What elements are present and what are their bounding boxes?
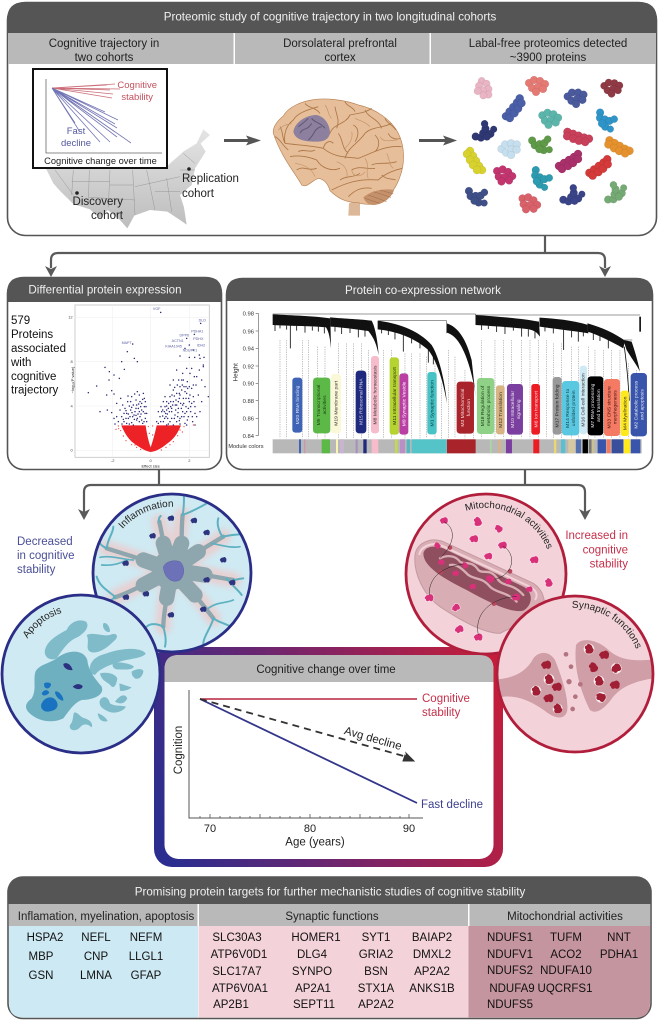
panel: cognitive change over time bbox=[154, 647, 503, 867]
chart: dendrogram: M1 Synaptic function bbox=[430, 380, 436, 426]
chart: dendrogram: M11 Intracellular transport bbox=[392, 367, 398, 425]
chart: dendrogram: 0.94 bbox=[243, 347, 255, 353]
text: 579 proteins: with bbox=[10, 357, 31, 369]
column headers bbox=[8, 33, 656, 64]
panel title: Protein co-expression network bbox=[345, 284, 501, 297]
panel header bbox=[8, 877, 651, 904]
circle: synaptic functions bbox=[496, 594, 654, 754]
column: inflammation targets bbox=[9, 926, 198, 1018]
chart: cognition by age: 90 bbox=[403, 823, 415, 835]
icons: protein clusters bbox=[462, 75, 635, 217]
column: synaptic targets: AP2A1 bbox=[295, 983, 331, 995]
column headers: Synaptic functions bbox=[285, 911, 379, 923]
inset: cognitive trajectories: stability bbox=[121, 92, 153, 103]
column: inflammation targets: CNP bbox=[84, 951, 108, 963]
chart: volcano plot: −log₁₀(P value) bbox=[70, 366, 75, 393]
chart: dendrogram: signaling bbox=[516, 399, 522, 419]
chart: dendrogram: M14 Response to bbox=[565, 389, 571, 428]
label: synaptic functions: Synaptic functions bbox=[572, 600, 640, 648]
text: increased in cognitive stability: stability bbox=[590, 558, 628, 570]
chart: dendrogram: M9 Synaptic Vesicle bbox=[401, 381, 407, 426]
text: decreased in cognitive stability: in cognitive bbox=[17, 550, 75, 562]
US map bbox=[45, 129, 210, 228]
chart: dendrogram: 0.84 bbox=[243, 434, 255, 440]
chart: volcano plot: VGF bbox=[153, 307, 161, 311]
chart: volcano plot bbox=[68, 305, 209, 468]
column: synaptic targets: AP2A2 bbox=[358, 999, 394, 1011]
chart: dendrogram: Height bbox=[233, 363, 240, 381]
panel title: Cognitive change over time bbox=[256, 664, 396, 676]
text: increased in cognitive stability: Increased in bbox=[565, 530, 628, 542]
label: apoptosis: Apoptosis bbox=[24, 608, 62, 639]
column headers: Mitochondrial activities bbox=[507, 911, 623, 923]
column: mitochondrial targets bbox=[468, 926, 650, 1018]
column headers: Inflamation, myelination, apoptosis bbox=[18, 911, 194, 923]
chart: dendrogram bbox=[228, 312, 647, 453]
panel header bbox=[7, 2, 657, 33]
arrow: brain to proteins bbox=[419, 136, 457, 146]
column: inflammation targets: LMNA bbox=[80, 970, 112, 982]
column: mitochondrial targets: NDUFV1 bbox=[487, 949, 533, 961]
panel: differential protein expression bbox=[7, 277, 222, 470]
module color bar bbox=[273, 439, 642, 453]
chart: dendrogram: M3 Mitochondrial bbox=[460, 389, 466, 427]
column: mitochondrial targets: UQCRFS1 bbox=[538, 983, 592, 995]
chart: dendrogram: M7 RNA processing bbox=[590, 383, 596, 428]
chart: dendrogram: M10 Intracellular bbox=[510, 391, 516, 428]
column: synaptic targets: SLC17A7 bbox=[212, 966, 262, 978]
column: synaptic targets: AP2B1 bbox=[213, 999, 249, 1011]
column: inflammation targets: NEFL bbox=[81, 932, 111, 944]
column: synaptic targets: BSN bbox=[364, 966, 388, 978]
column: synaptic targets: STX1A bbox=[358, 983, 395, 995]
inset: cognitive trajectories: decline bbox=[61, 138, 91, 149]
chart: dendrogram: 0.92 bbox=[243, 364, 254, 370]
text: 579 proteins: trajectory bbox=[11, 384, 59, 396]
chart: volcano plot: 0 bbox=[70, 448, 73, 453]
chart: dendrogram: M16 Cell-cell interaction bbox=[581, 373, 587, 427]
chart: dendrogram: 0.88 bbox=[243, 399, 254, 405]
chart: dendrogram: M15 Ribosomal RNA bbox=[359, 378, 365, 425]
chart: cognition by age: Fast decline bbox=[421, 799, 483, 811]
panel title: Proteomic study of cognitive trajectory in two longitudinal cohorts bbox=[164, 10, 496, 24]
text: decreased in cognitive stability: Decreased bbox=[17, 536, 73, 548]
inset: cognitive trajectories: Cognitive bbox=[117, 80, 157, 91]
text: decreased in cognitive stability bbox=[17, 536, 75, 576]
column: mitochondrial targets: ACO2 bbox=[550, 949, 582, 961]
panel: proteomic study bbox=[7, 2, 657, 236]
column: synaptic targets: HOMER1 bbox=[291, 932, 341, 944]
chart: dendrogram: M13 CNS structure bbox=[607, 386, 613, 429]
column: inflammation targets: NEFM bbox=[130, 932, 162, 944]
chart: cognition by age: Avg decline bbox=[343, 725, 403, 753]
chart: dendrogram: morphogenesis bbox=[613, 390, 619, 424]
column: synaptic targets: DMXL2 bbox=[413, 949, 451, 961]
inset: cognitive trajectories bbox=[33, 69, 167, 168]
column: synaptic targets: BAIAP2 bbox=[412, 932, 452, 944]
column: inflammation targets: HSPA2 bbox=[27, 932, 63, 944]
label: discovery cohort bbox=[73, 191, 124, 222]
chart: dendrogram: function bbox=[466, 399, 472, 416]
text: 579 proteins bbox=[10, 315, 66, 396]
chart: volcano plot: 4 bbox=[70, 403, 73, 408]
inset: cognitive trajectories: Cognitive change over time bbox=[44, 156, 157, 166]
text: 579 proteins: cognitive bbox=[11, 371, 56, 383]
panel header bbox=[7, 277, 222, 302]
column: synaptic targets: ATP6V0A1 bbox=[212, 983, 268, 995]
chart: dendrogram: M18 Regulation of bbox=[480, 385, 486, 426]
chart: dendrogram: M12 Translation bbox=[498, 392, 504, 428]
chart: volcano plot: ACTN1 bbox=[172, 339, 184, 343]
column: inflammation targets: MBP bbox=[29, 951, 54, 963]
column headers: Labal-free proteomics detected bbox=[469, 38, 627, 50]
inset: cognitive trajectories: Fast bbox=[67, 126, 86, 137]
chart: dendrogram: 0.86 bbox=[243, 417, 254, 423]
chart: dendrogram: M6 Ion transport bbox=[533, 391, 539, 427]
chart: volcano plot: PDHX bbox=[193, 337, 204, 341]
column headers: Dorsolateral prefrontal bbox=[283, 38, 397, 50]
chart: cognition by age: stability bbox=[422, 707, 461, 719]
circle: mitochondrial activities bbox=[404, 492, 568, 656]
chart: volcano plot: KIAA1045 bbox=[165, 345, 182, 349]
chart: volcano plot: PDHA1 bbox=[191, 330, 203, 334]
chart: volcano plot: MAPT bbox=[122, 341, 132, 345]
text: 579 proteins: Proteins bbox=[11, 329, 53, 341]
label: discovery cohort: Discovery bbox=[73, 196, 123, 208]
chart: volcano plot: 12 bbox=[68, 315, 73, 320]
chart: dendrogram: Module colors bbox=[228, 444, 264, 450]
column: synaptic targets: ANKS1B bbox=[409, 983, 455, 995]
chart: dendrogram: M19 Membrane part bbox=[334, 380, 340, 426]
chart: dendrogram: M20 RNA binding bbox=[295, 385, 301, 424]
chart: volcano plot: DPP6 bbox=[180, 334, 189, 338]
chart: volcano plot: IDH2 bbox=[197, 343, 205, 347]
column: synaptic targets: DLG4 bbox=[297, 949, 328, 961]
chart: dendrogram: M4 Myelination bbox=[622, 396, 628, 430]
chart: dendrogram: M17 Protein folding bbox=[555, 384, 561, 427]
column: mitochondrial targets: NDUFA9 bbox=[489, 983, 535, 995]
text: decreased in cognitive stability: stability bbox=[17, 564, 56, 576]
column: mitochondrial targets: NDUFS1 bbox=[487, 932, 533, 944]
column: inflammation targets: GFAP bbox=[131, 970, 162, 982]
column: synaptic targets: SYT1 bbox=[362, 932, 390, 944]
column: synaptic targets: GRIA2 bbox=[359, 949, 393, 961]
connector arrows from top panel bbox=[45, 236, 611, 277]
column: mitochondrial targets: NDUFA10 bbox=[540, 965, 592, 977]
column: mitochondrial targets: NDUFS2 bbox=[487, 965, 533, 977]
chart: volcano plot: NDUFV1 bbox=[183, 348, 197, 352]
column: synaptic targets: SLC30A3 bbox=[212, 932, 262, 944]
column headers: ~3900 proteins bbox=[510, 52, 586, 64]
chart: cognition by age: Age (years) bbox=[285, 836, 345, 848]
panel header bbox=[226, 278, 653, 301]
icon: brain bbox=[273, 99, 404, 216]
column: mitochondrial targets: TUFM bbox=[550, 932, 582, 944]
connector arrows from network panels bbox=[78, 470, 591, 520]
chart: dendrogram: 0.98 bbox=[243, 312, 254, 318]
panel title: Differential protein expression bbox=[28, 284, 182, 296]
chart: dendrogram: and apoptosis bbox=[640, 389, 646, 420]
text: increased in cognitive stability bbox=[565, 530, 628, 570]
circle: inflammation bbox=[92, 492, 252, 654]
chart: cognition by age: Cognition bbox=[173, 726, 185, 774]
panel: protein co-expression network bbox=[226, 278, 653, 470]
column headers: cortex bbox=[324, 52, 356, 64]
chart: volcano plot: -2 bbox=[111, 458, 115, 463]
label: discovery cohort: cohort bbox=[91, 210, 124, 222]
chart: volcano plot: Effect size bbox=[141, 463, 161, 468]
label: inflammation: Inflammation bbox=[118, 500, 173, 528]
panel: promising protein targets bbox=[8, 877, 651, 1018]
chart: dendrogram: M8 Metabolic homeostasis bbox=[372, 365, 378, 424]
chart: cognition by age: 80 bbox=[304, 823, 316, 835]
column: inflammation targets: GSN bbox=[29, 970, 53, 982]
chart: dendrogram: M5 Transcriptional bbox=[316, 385, 322, 425]
chart: cognition by age bbox=[173, 690, 483, 848]
text: increased in cognitive stability: cognitive bbox=[583, 544, 628, 556]
column: synaptic targets: SYNPO bbox=[292, 966, 332, 978]
column: synaptic targets: ATP6V0D1 bbox=[211, 949, 267, 961]
circle: apoptosis bbox=[0, 594, 162, 754]
column: mitochondrial targets: PDHA1 bbox=[600, 949, 638, 961]
column headers: Cognitive trajectory in bbox=[49, 38, 159, 50]
text: 579 proteins: 579 bbox=[11, 315, 30, 327]
chart: dendrogram: 0.90 bbox=[243, 382, 255, 388]
label: replication cohort: Replication bbox=[182, 173, 239, 185]
chart: dendrogram: metabolic process bbox=[486, 385, 492, 426]
chart: volcano plot: 2 bbox=[188, 458, 191, 463]
chart: volcano plot: 8 bbox=[70, 359, 73, 364]
column: synaptic targets: SEPT11 bbox=[293, 999, 335, 1011]
panel header bbox=[164, 655, 494, 682]
panel title: Promising protein targets for further mechanistic studies of cognitive stability bbox=[135, 886, 525, 898]
column: mitochondrial targets: NDUFS5 bbox=[487, 999, 533, 1011]
chart: dendrogram: 0.96 bbox=[243, 329, 254, 335]
column headers: two cohorts bbox=[75, 52, 134, 64]
column: inflammation targets: LLGL1 bbox=[129, 951, 163, 963]
text: 579 proteins: associated bbox=[11, 343, 66, 355]
chart: dendrogram: and translation bbox=[596, 389, 602, 422]
chart: volcano plot: DLD bbox=[199, 318, 206, 322]
label: replication cohort: cohort bbox=[182, 188, 215, 200]
column headers bbox=[9, 904, 650, 926]
column: mitochondrial targets: NNT bbox=[607, 932, 631, 944]
chart: cognition by age: 70 bbox=[204, 823, 216, 835]
chart: volcano plot: 0 bbox=[150, 458, 153, 463]
arrow: map to brain bbox=[224, 136, 261, 146]
label: replication cohort bbox=[182, 167, 239, 200]
chart: dendrogram: unfolded protein bbox=[571, 390, 577, 426]
chart: cognition by age: Cognitive bbox=[422, 693, 470, 705]
label: mitochondrial activities: Mitochondrial activities bbox=[465, 500, 552, 549]
chart: dendrogram: M2 Catabolic process bbox=[634, 380, 640, 429]
column: synaptic targets: AP2A2 bbox=[414, 966, 450, 978]
chart: dendrogram: activities bbox=[322, 395, 328, 415]
column: synaptic targets bbox=[198, 926, 468, 1018]
